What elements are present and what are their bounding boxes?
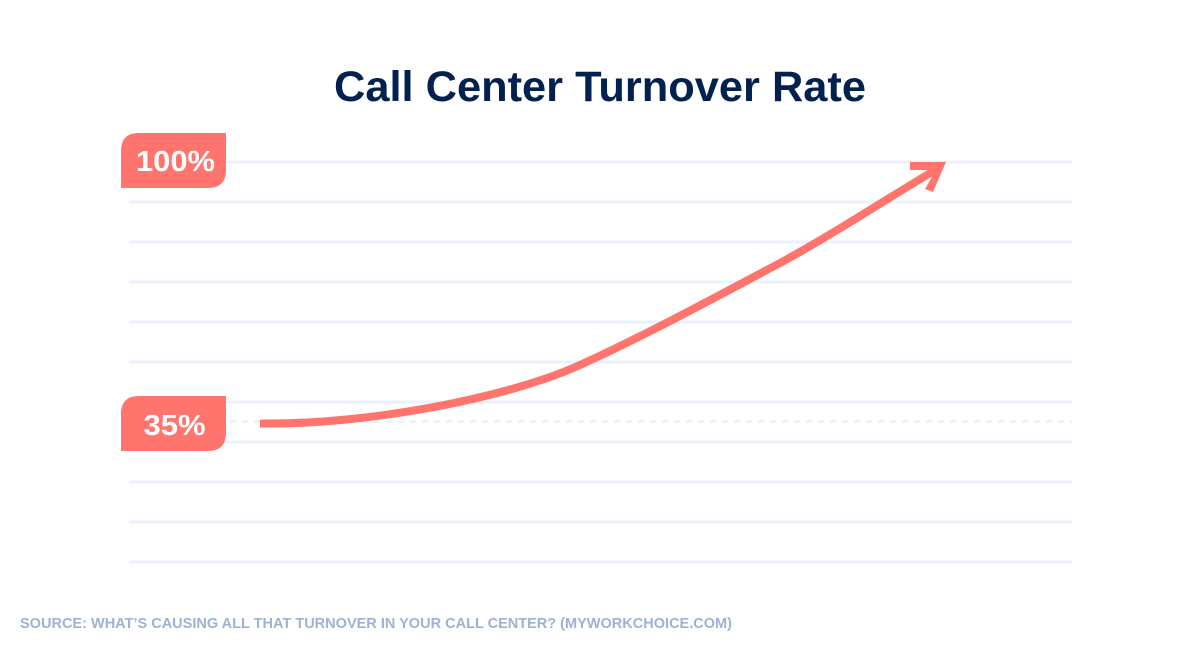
title: Call Center Turnover Rate [334, 63, 866, 111]
badge: 100% [121, 133, 226, 188]
badge: 35%: 35% [144, 410, 206, 442]
badge: 100%: 100% [136, 146, 215, 178]
badge: 35% [121, 396, 226, 451]
rising turnover arrow [260, 162, 946, 424]
source note: SOURCE: WHAT’S CAUSING ALL THAT TURNOVER IN YOUR CALL CENTER? (MYWORKCHOICE.COM) [20, 616, 732, 632]
